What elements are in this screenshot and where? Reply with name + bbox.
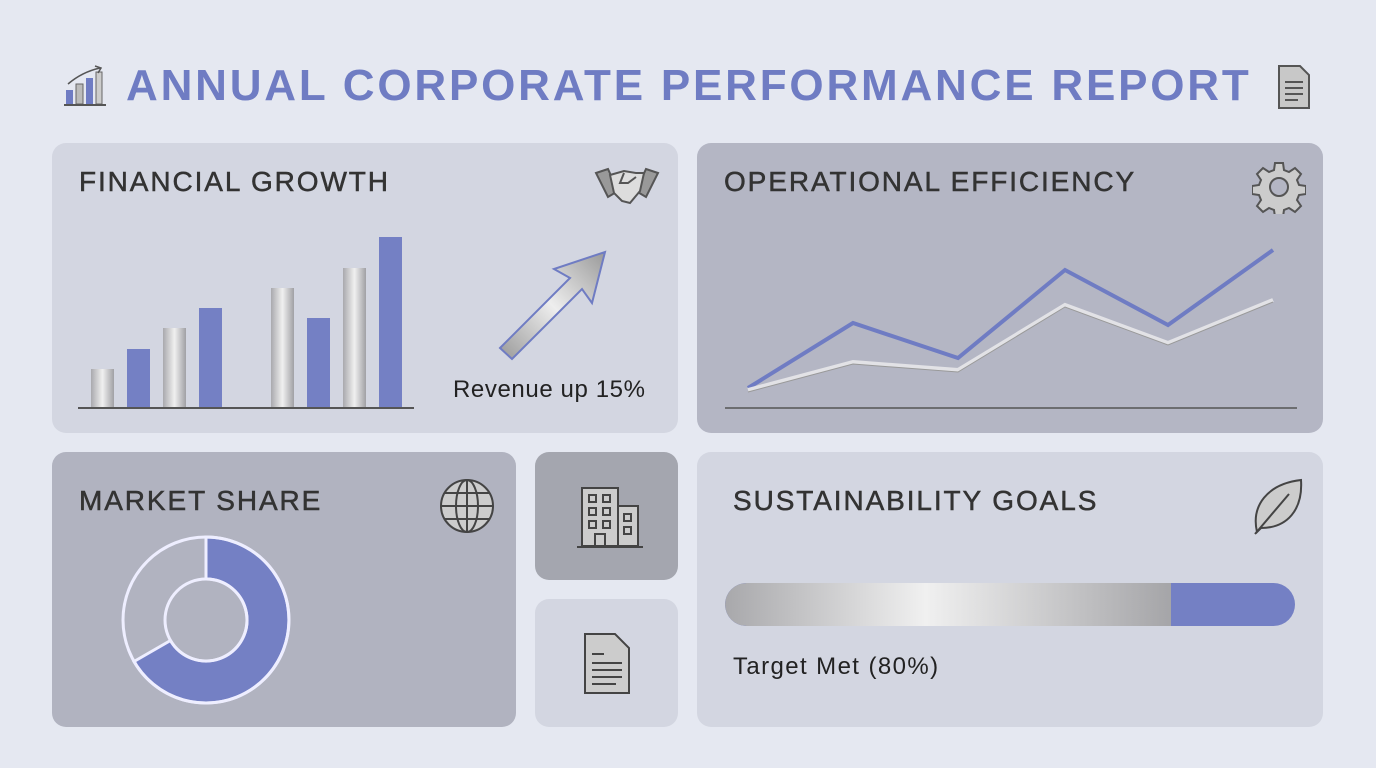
heading: operational efficiency: OPERATIONAL EFFICIENCY [724,166,1136,197]
panel: document tile [535,599,678,727]
panel: building tile [535,452,678,580]
icon: building [577,487,643,548]
icon: document [584,633,630,694]
panel: market share [52,452,516,727]
icon: globe [440,479,494,533]
icon: chart growth [64,65,106,106]
arrow: growth [498,250,606,360]
heading: sustainability goals: SUSTAINABILITY GOALS [733,485,1098,516]
progress bar [725,583,1295,626]
panel: sustainability goals [697,452,1323,727]
bar chart [78,237,414,409]
donut chart [122,536,290,704]
icon: leaf [1254,478,1302,535]
line chart [725,248,1297,409]
panel: financial growth [52,143,678,433]
icon: gear [1252,162,1306,214]
icon: document [1278,65,1310,109]
heading: market share: MARKET SHARE [79,485,322,516]
text: target met: Target Met (80%) [733,653,939,680]
panel: operational efficiency [697,143,1323,433]
icon: handshake [594,168,660,204]
text: revenue up 15%: Revenue up 15% [453,376,646,403]
heading: financial growth: FINANCIAL GROWTH [79,166,390,197]
title: ANNUAL CORPORATE PERFORMANCE REPORT [126,61,1252,110]
